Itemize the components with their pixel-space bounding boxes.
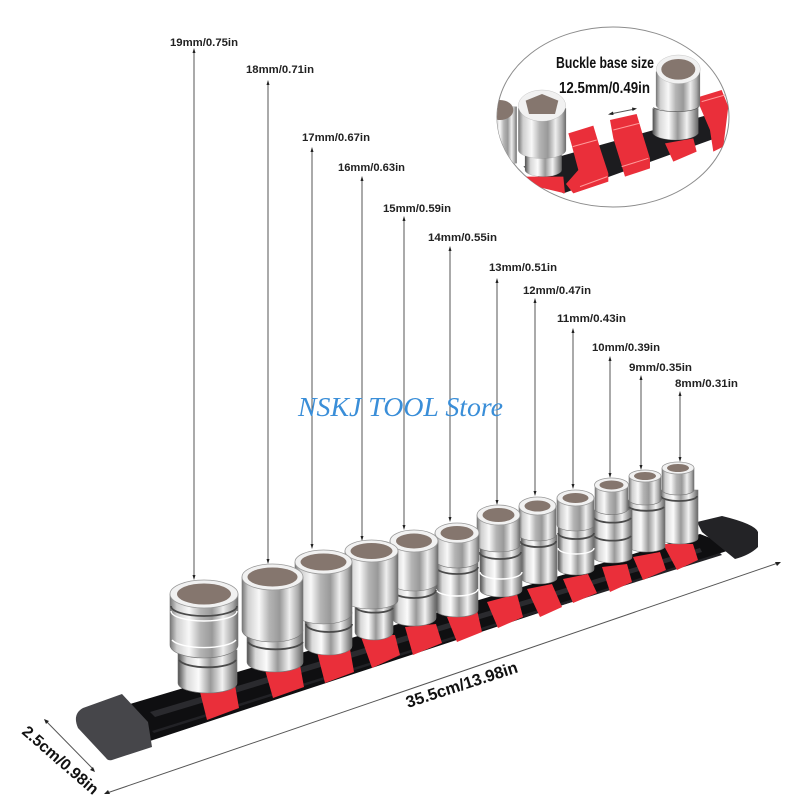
socket 10mm [593,478,632,563]
socket 14mm [435,523,479,617]
socket 16mm [345,540,398,640]
red clips [200,544,698,720]
dimension: 8mm socket [675,378,738,462]
dimension: 16mm socket [338,162,405,541]
dimension: 12mm socket [523,285,591,496]
length dimension: 35.5cm/13.98in [404,659,520,712]
left end cap [76,694,152,760]
rail [130,534,736,741]
inset partial left socket [497,100,517,164]
watermark: NSKJ TOOL Store [297,392,503,422]
dimension: 17mm socket: 17mm/0.67in [302,132,370,144]
dimension: 8mm socket: 8mm/0.31in [675,378,738,390]
dimension: 15mm socket [383,203,451,530]
dimension: 16mm socket: 16mm/0.63in [338,162,405,174]
socket 19mm [170,580,238,693]
socket 8mm [660,462,698,544]
socket 15mm [390,530,438,626]
dimension: 13mm socket: 13mm/0.51in [489,262,557,274]
dimension: 14mm socket: 14mm/0.55in [428,232,497,244]
dimension: 14mm socket [428,232,497,522]
dimension: 19mm socket [170,37,238,580]
dimension: 9mm socket [629,362,692,470]
dimension: 17mm socket [302,132,370,549]
socket 11mm [557,490,594,575]
dimension: 19mm socket: 19mm/0.75in [170,37,238,49]
width dimension: 2.5cm/0.98in [18,723,101,798]
dimension: 15mm socket: 15mm/0.59in [383,203,451,215]
socket 12mm [519,497,557,584]
socket 13mm [477,505,522,597]
inset clips [523,90,728,193]
dimension: 12mm socket: 12mm/0.47in [523,285,591,297]
length dimension [104,562,781,794]
inset socket A [518,90,566,177]
dimension: 13mm socket [489,262,557,505]
inset heading: Buckle base size [556,55,654,72]
socket 17mm [295,550,352,655]
socket 9mm [628,470,665,552]
dimension: 10mm socket: 10mm/0.39in [592,342,660,354]
socket 18mm [242,564,303,672]
dimension: 18mm socket: 18mm/0.71in [246,64,314,76]
inset size label: 12.5mm/0.49in [559,80,650,97]
dimension: 18mm socket [246,64,314,564]
inset: buckle base detail [487,27,729,207]
dimension: 11mm socket: 11mm/0.43in [557,313,626,325]
inset rail [523,113,720,193]
inset socket B [653,55,700,140]
right end cap [697,516,758,559]
dimension: 10mm socket [592,342,660,478]
dimension: 11mm socket [557,313,626,489]
inset arrow [608,108,637,115]
dimension: 9mm socket: 9mm/0.35in [629,362,692,374]
